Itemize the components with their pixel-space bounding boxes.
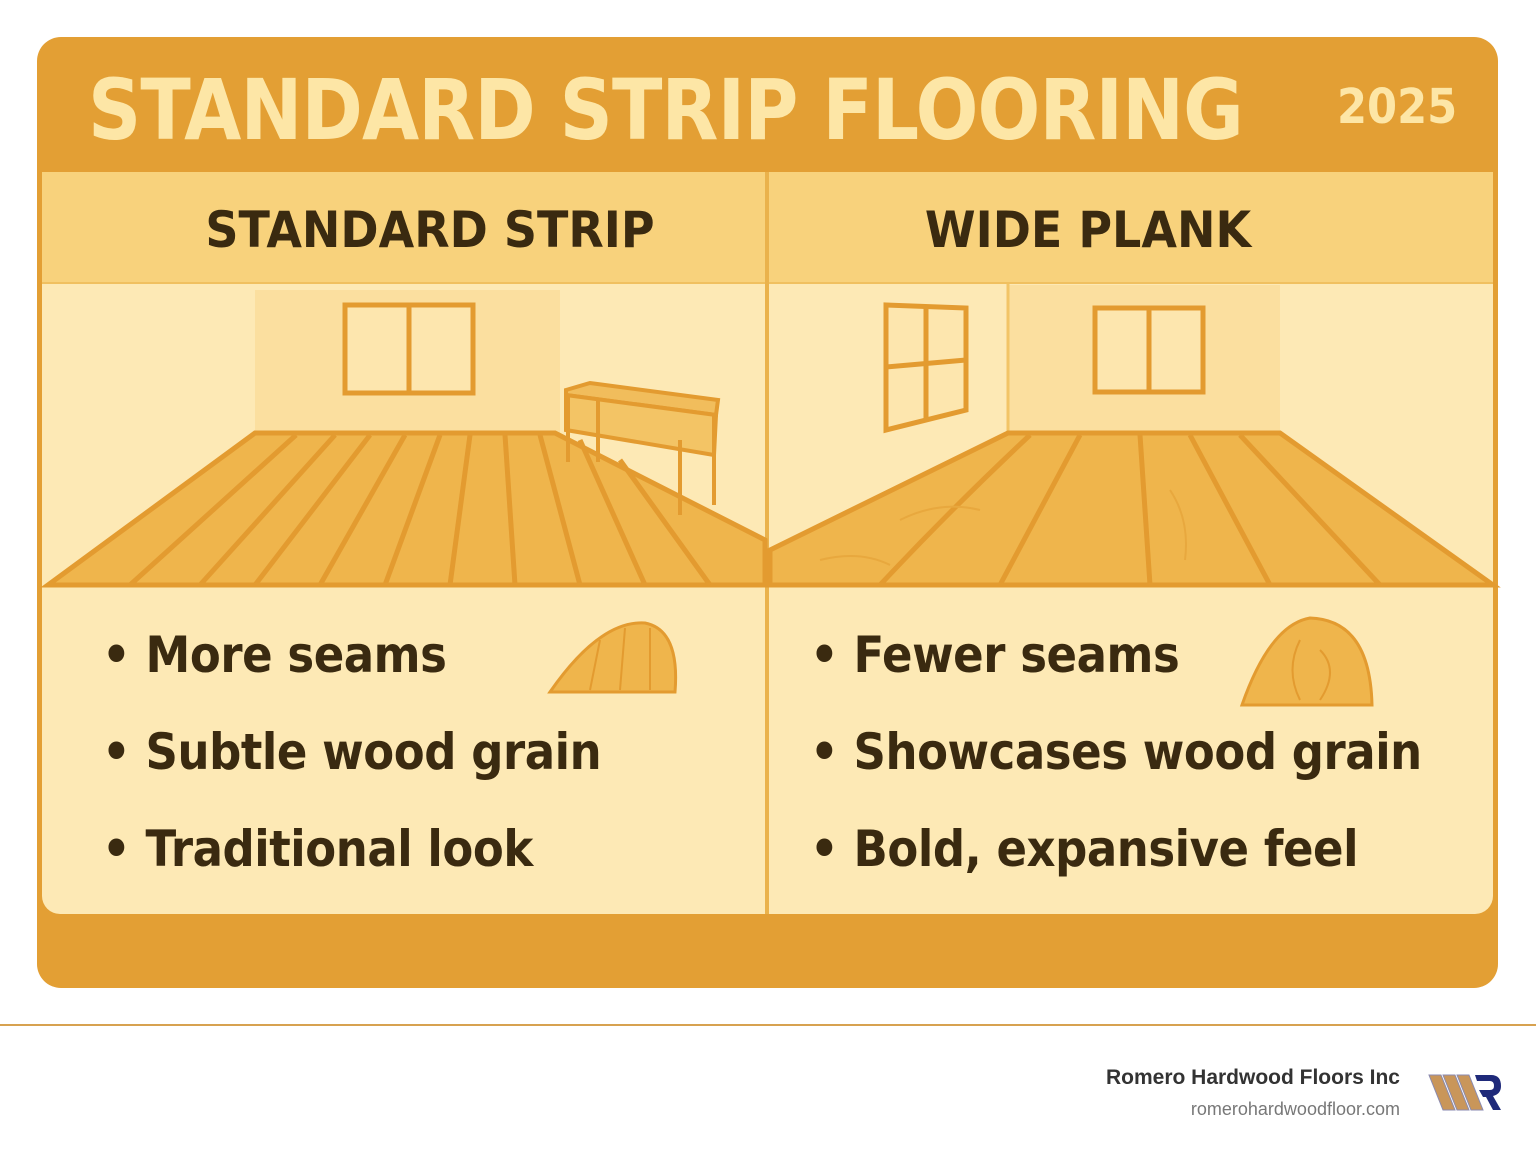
bullets: wide plank: • Bold, expansive feel bbox=[810, 820, 1358, 878]
window bbox=[345, 305, 473, 393]
icon: strip wood sample bbox=[550, 623, 676, 692]
room: wide plank bbox=[770, 284, 1493, 585]
footer brand text: Romero Hardwood Floors Inc bbox=[1106, 1066, 1400, 1089]
windows bbox=[886, 305, 966, 430]
footer brand text: romerohardwoodfloor.com bbox=[1191, 1099, 1400, 1119]
bullets: standard strip: • More seams bbox=[102, 626, 446, 684]
bullets: wide plank: • Fewer seams bbox=[810, 626, 1179, 684]
title: STANDARD STRIP FLOORING bbox=[88, 61, 1243, 159]
header: wide plank bbox=[769, 172, 1493, 284]
bullets: wide plank bbox=[810, 626, 1422, 878]
room: standard strip bbox=[48, 290, 765, 585]
card bbox=[37, 37, 1498, 988]
header: wide plank: WIDE PLANK bbox=[925, 201, 1251, 259]
logo bbox=[1428, 1074, 1501, 1110]
bullets: standard strip: • Subtle wood grain bbox=[102, 723, 601, 781]
bullets: standard strip: • Traditional look bbox=[102, 820, 533, 878]
header: standard strip: STANDARD STRIP bbox=[205, 201, 655, 259]
icon: wide plank sample bbox=[1242, 618, 1372, 705]
bullets: wide plank: • Showcases wood grain bbox=[810, 723, 1422, 781]
header: standard strip bbox=[42, 172, 766, 284]
bullets: standard strip bbox=[102, 626, 601, 878]
table bbox=[566, 383, 718, 515]
footer brand text bbox=[1106, 1066, 1400, 1119]
year: 2025 bbox=[1337, 79, 1457, 135]
comparison panel bbox=[42, 172, 1493, 914]
